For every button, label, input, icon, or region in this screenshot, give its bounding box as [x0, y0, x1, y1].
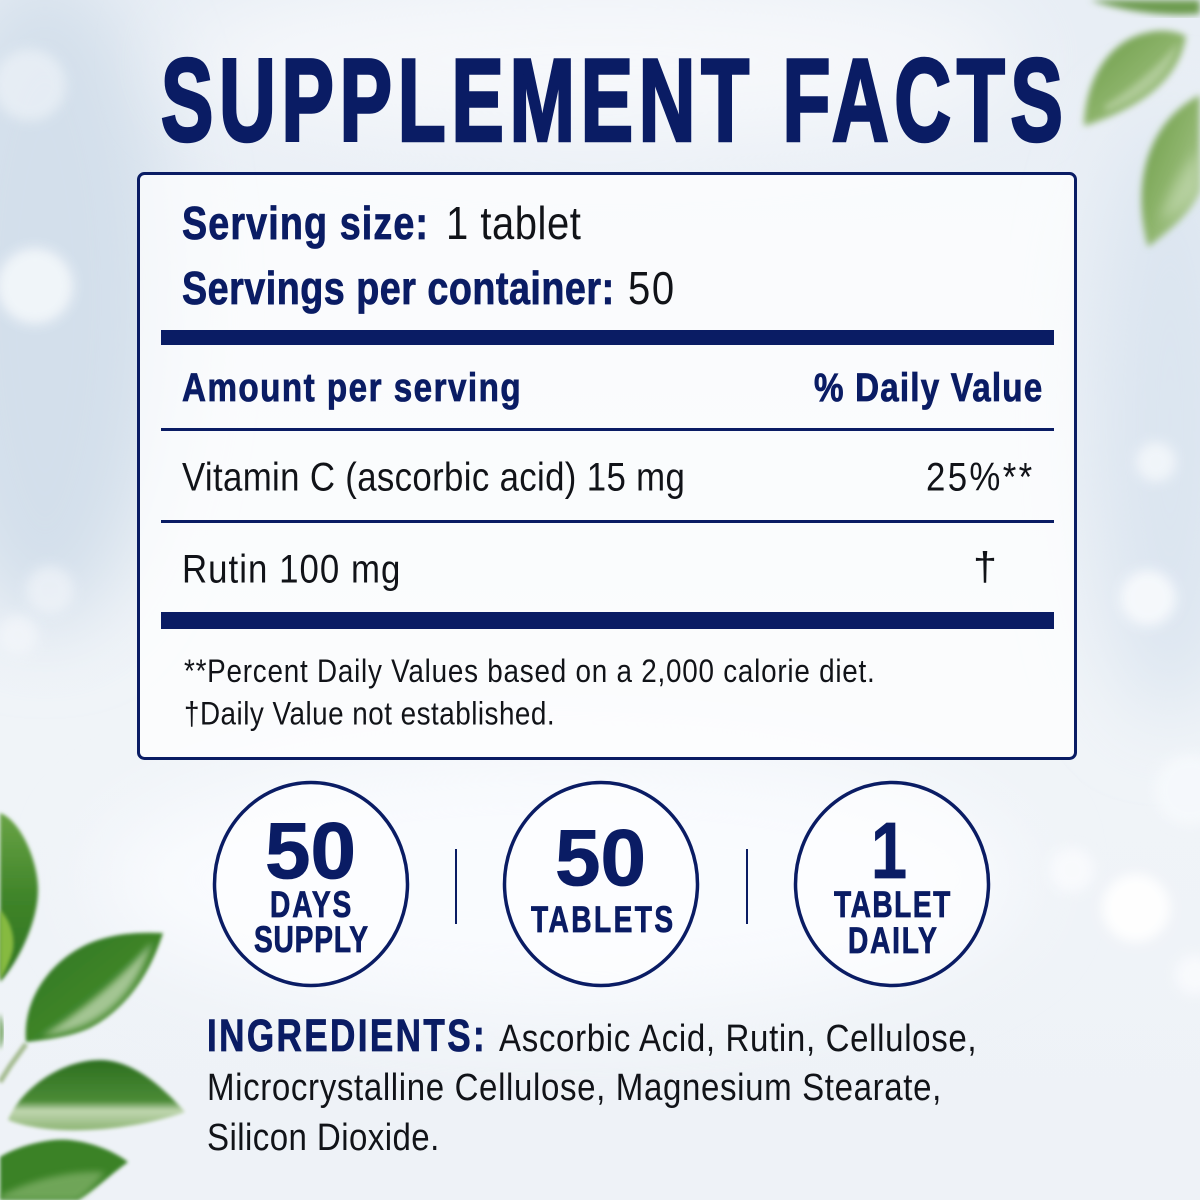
- leaves: bottom left: [0, 813, 185, 1200]
- row: vitamin C: [182, 454, 1032, 499]
- column headers: [182, 365, 1042, 410]
- ingredients: INGREDIENTS:: [207, 1010, 485, 1061]
- footnotes: **Percent Daily Values based on a 2,000 calorie diet.: [184, 654, 875, 689]
- serving size: Serving size:: [182, 197, 428, 249]
- footnotes: †Daily Value not established.: [184, 697, 555, 732]
- servings per container: Servings per container:: [182, 262, 614, 314]
- badge: 50 days supply: [214, 782, 408, 986]
- title: SUPPLEMENT FACTS: [161, 36, 1063, 166]
- badge: 50 tablets: 50: [555, 813, 646, 902]
- row: vitamin C: 25%**: [926, 454, 1032, 499]
- badge: 1 tablet daily: TABLET: [834, 883, 950, 925]
- ingredients: Ascorbic Acid, Rutin, Cellulose,: [499, 1017, 977, 1060]
- servings per container: 50: [628, 263, 674, 315]
- row: rutin: Rutin 100 mg: [182, 546, 400, 591]
- badge: 50 tablets: TABLETS: [531, 898, 673, 940]
- column headers: % Daily Value: [814, 365, 1042, 410]
- panel: supplement facts table: [138, 174, 1076, 758]
- ingredients: [207, 1010, 977, 1159]
- ingredients: Silicon Dioxide.: [207, 1116, 439, 1159]
- badge: 50 days supply: 50: [265, 806, 356, 895]
- badge: 1 tablet daily: 1: [871, 806, 907, 895]
- row: rutin: †: [973, 545, 997, 589]
- serving size: [182, 197, 581, 250]
- footnotes: [184, 654, 875, 732]
- badge: 50 tablets: [504, 782, 698, 986]
- serving size: 1 tablet: [446, 198, 581, 250]
- row: vitamin C: Vitamin C (ascorbic acid) 15 mg: [182, 454, 685, 499]
- badge: 50 days supply: DAYS: [270, 883, 351, 925]
- badge: 50 days supply: SUPPLY: [254, 918, 368, 960]
- ingredients: Microcrystalline Cellulose, Magnesium Stearate,: [207, 1066, 941, 1109]
- badge: 1 tablet daily: DAILY: [848, 919, 937, 961]
- column headers: Amount per serving: [182, 365, 521, 410]
- row: rutin: [182, 545, 997, 591]
- badge: 1 tablet daily: [796, 782, 988, 986]
- leaves: top right: [1084, 0, 1200, 247]
